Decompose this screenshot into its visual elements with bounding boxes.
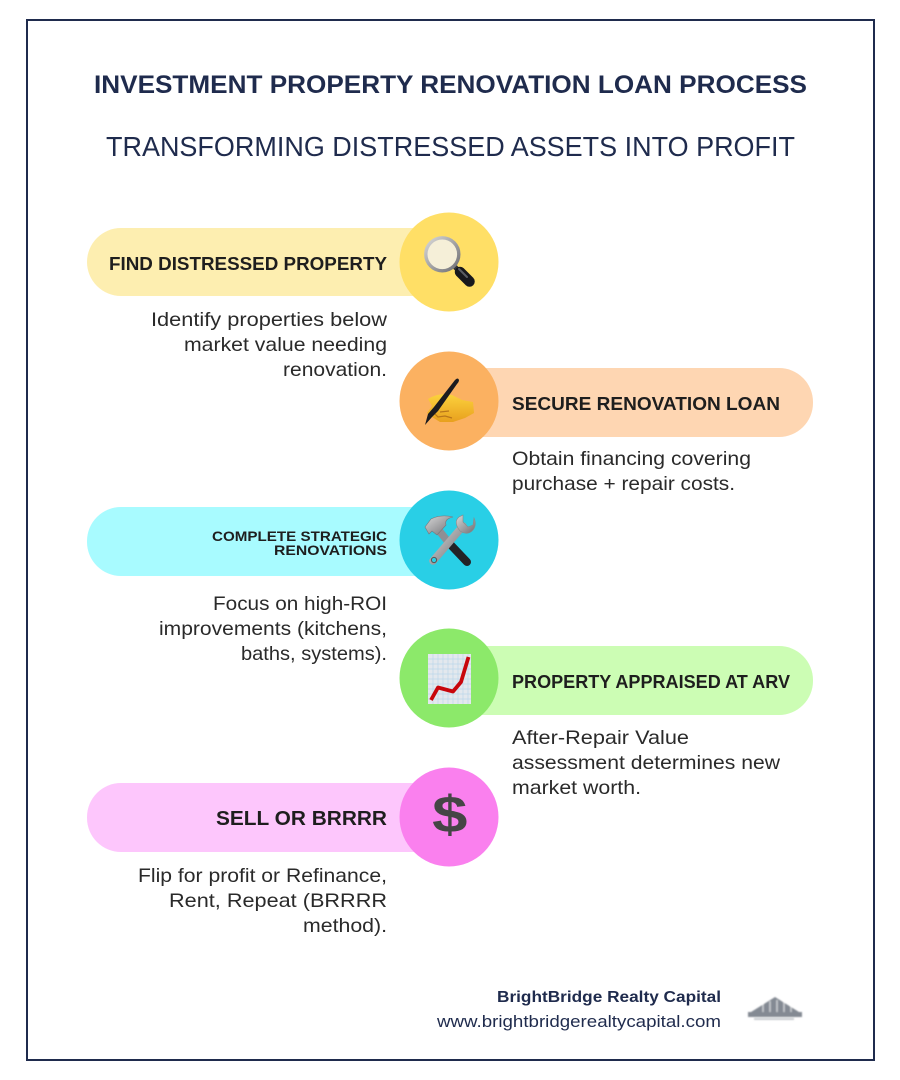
- step 1 description: [151, 309, 388, 381]
- step 2 description: [512, 448, 751, 495]
- icon: magnifying glass: [426, 238, 470, 282]
- icon: hammer and wrench: [425, 515, 475, 563]
- step 1: find distressed property: [87, 212, 498, 381]
- step 1 description: Identify properties below: [151, 309, 388, 331]
- subtitle: TRANSFORMING DISTRESSED ASSETS INTO PROFIT: [106, 131, 795, 162]
- step 5 pill: [87, 783, 467, 852]
- step 5 description: Rent, Repeat (BRRRR: [169, 890, 387, 912]
- step 1 description: renovation.: [283, 359, 387, 381]
- step 4 description: assessment determines new: [512, 752, 781, 774]
- step 2 description: purchase + repair costs.: [512, 473, 735, 495]
- icon: dollar sign: $: [432, 785, 467, 844]
- step 4 circle: [400, 628, 498, 728]
- step 3 circle: [400, 490, 498, 590]
- step 2 heading: SECURE RENOVATION LOAN: [512, 394, 780, 414]
- icon: writing hand: [425, 378, 474, 425]
- step 3 description: improvements (kitchens,: [159, 618, 387, 640]
- step 3 description: [159, 593, 387, 665]
- step 5 description: Flip for profit or Refinance,: [138, 865, 387, 887]
- step 2: secure renovation loan: [400, 352, 813, 495]
- step 5 description: [138, 865, 387, 937]
- step 4 description: [512, 727, 781, 799]
- step 5 description: method).: [303, 915, 387, 937]
- step 4 description: market worth.: [512, 777, 641, 799]
- step 3 description: Focus on high-ROI: [213, 593, 387, 615]
- step 3 heading: RENOVATIONS: [274, 542, 387, 558]
- step 4 heading: PROPERTY APPRAISED AT ARV: [512, 672, 790, 692]
- step 2 circle: [400, 352, 498, 450]
- step 1 heading: FIND DISTRESSED PROPERTY: [109, 254, 387, 274]
- title: INVESTMENT PROPERTY RENOVATION LOAN PROCESS: [94, 71, 807, 99]
- footer company name: BrightBridge Realty Capital: [497, 989, 721, 1006]
- step 4 description: After-Repair Value: [512, 727, 689, 749]
- step 3 heading: [212, 528, 387, 558]
- step 1 circle: [400, 212, 498, 312]
- step 3: complete strategic renovations: [87, 490, 498, 665]
- icon: chart increasing: [428, 654, 471, 704]
- footer logo: [748, 997, 802, 1020]
- step 3 pill: [87, 507, 467, 576]
- step 2 description: Obtain financing covering: [512, 448, 751, 470]
- footer website: www.brightbridgerealtycapital.com: [436, 1013, 721, 1031]
- step 2 pill: [432, 368, 813, 437]
- step 5 heading: SELL OR BRRRR: [216, 808, 388, 830]
- step 5: sell or BRRRR: [87, 768, 498, 937]
- step 1 pill: [87, 228, 467, 296]
- step 4: property appraised at ARV: [400, 628, 813, 799]
- step 3 description: baths, systems).: [241, 643, 387, 665]
- step 1 description: market value needing: [184, 334, 387, 356]
- step 3 heading: COMPLETE STRATEGIC: [212, 528, 387, 544]
- step 5 circle: [400, 768, 498, 866]
- step 4 pill: [432, 646, 813, 715]
